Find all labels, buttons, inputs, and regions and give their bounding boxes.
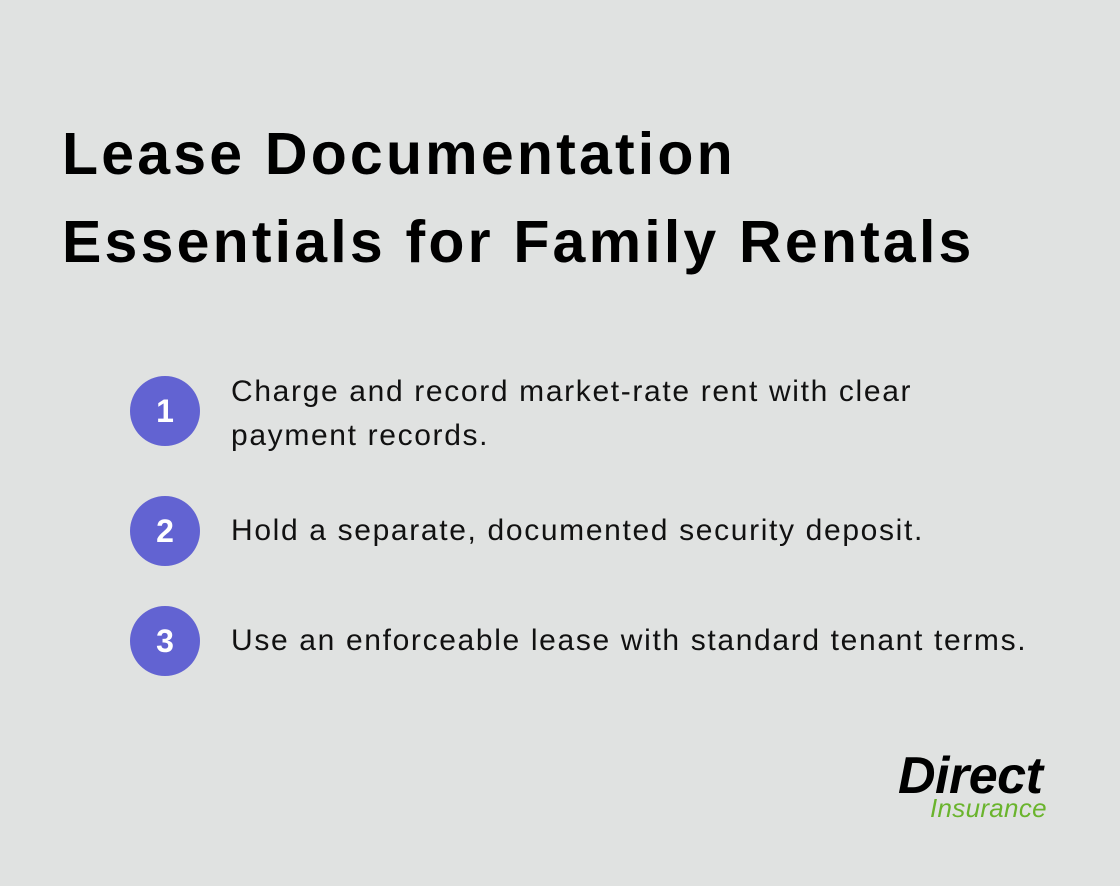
circle 1 [130, 376, 200, 446]
item 1 [130, 375, 912, 452]
circle 3 [130, 606, 200, 676]
circle 3: 3 [156, 623, 174, 659]
circle 1: 1 [156, 393, 174, 429]
title: Essentials for Family Rentals [62, 209, 975, 275]
text 3: Use an enforceable lease with standard tenant terms. [231, 624, 1027, 657]
text 2: Hold a separate, documented security deposit. [231, 514, 924, 547]
item 3 [130, 606, 1027, 676]
title [62, 121, 975, 275]
title: Lease Documentation [62, 121, 736, 187]
item 2 [130, 496, 924, 566]
text 1: payment records. [231, 419, 489, 452]
text 1 [231, 375, 912, 452]
circle 2 [130, 496, 200, 566]
logo: Direct [898, 747, 1042, 805]
logo: Insurance [930, 793, 1047, 823]
circle 2: 2 [156, 513, 174, 549]
text 1: Charge and record market-rate rent with clear [231, 375, 912, 408]
